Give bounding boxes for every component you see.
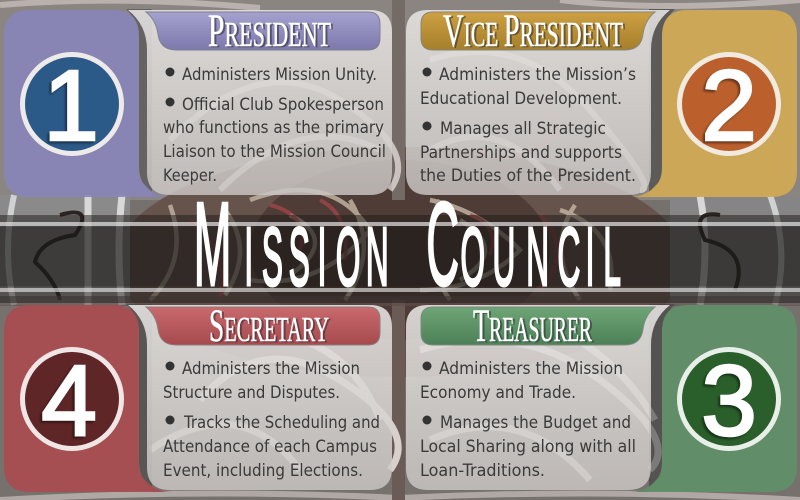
number tile 3: 3	[701, 345, 757, 457]
panel: president	[4, 5, 392, 197]
duties: who functions as the primary	[163, 118, 384, 138]
duties: Loan-Traditions.	[420, 461, 545, 481]
text card	[128, 305, 392, 490]
number tile 4	[4, 305, 172, 492]
duties: Partnerships and supports	[420, 143, 622, 163]
heading ribbon: SECRETARY	[209, 300, 329, 352]
title band	[0, 215, 800, 303]
duties: Administers Mission Unity.	[182, 65, 377, 85]
duties: Structure and Disputes.	[163, 383, 340, 403]
duties	[163, 359, 380, 481]
heading ribbon	[146, 5, 380, 57]
duties: Official Club Spokesperson	[182, 95, 384, 115]
title: Mission Council: MISSION COUNCIL	[194, 179, 621, 311]
duties: Administers the Mission	[439, 359, 623, 379]
duties: Tracks the Scheduling and	[183, 413, 380, 433]
heading ribbon: PRESIDENT	[208, 5, 331, 57]
duties: Attendance of each Campus	[163, 437, 377, 457]
duties	[163, 65, 386, 186]
panel: treasurer	[406, 300, 797, 492]
duties: Manages the Budget and	[440, 413, 631, 433]
duties: Liaison to the Mission Council	[163, 142, 386, 162]
panel: secretary	[4, 300, 392, 492]
heading ribbon: VICE PRESIDENT	[443, 5, 623, 57]
duties: Keeper.	[163, 166, 217, 186]
duties	[420, 65, 636, 186]
number tile 1: 1	[43, 50, 99, 162]
duties: the Duties of the President.	[420, 166, 636, 186]
duties	[420, 359, 636, 481]
number tile 1	[4, 10, 172, 197]
duties: Administers the Mission’s	[439, 65, 636, 85]
duties: Educational Development.	[420, 89, 622, 109]
text card	[406, 10, 670, 195]
text card	[406, 305, 670, 490]
text card	[128, 10, 392, 195]
number tile 3	[629, 305, 797, 492]
number tile 2: 2	[701, 50, 757, 162]
duties: Administers the Mission	[182, 359, 360, 379]
duties: Event, including Elections.	[163, 461, 363, 481]
duties: Manages all Strategic	[440, 119, 606, 139]
heading ribbon	[146, 300, 380, 352]
panel: vice president	[406, 5, 797, 197]
number tile 4: 4	[41, 345, 97, 457]
number tile 2	[629, 10, 797, 197]
heading ribbon: TREASURER	[473, 300, 592, 352]
duties: Local Sharing along with all	[420, 437, 636, 457]
duties: Economy and Trade.	[420, 383, 576, 403]
